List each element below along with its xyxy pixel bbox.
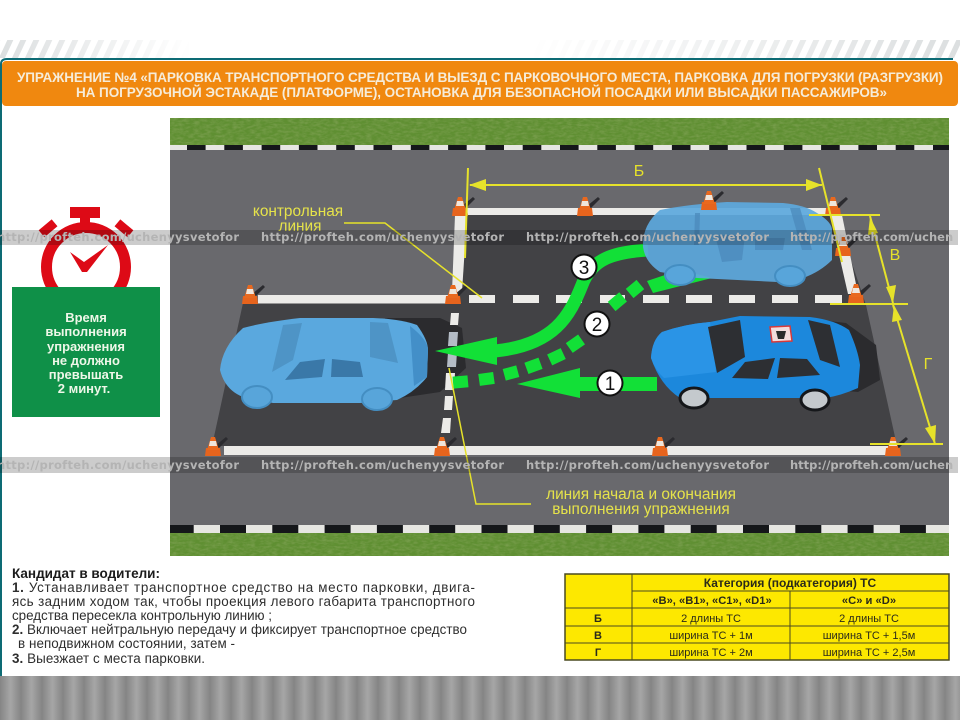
- watermark band upper: [0, 230, 958, 245]
- time-limit text: выполнения: [45, 324, 127, 339]
- watermark band lower: http://profteh.com/uchenyysvetofor: [0, 458, 239, 472]
- header banner: [2, 61, 958, 106]
- table rows: В: [594, 630, 602, 642]
- green time-limit box: [12, 287, 160, 417]
- arrow 3: curved path: [435, 250, 648, 365]
- table header: Категория (подкатегория) ТС: [704, 576, 877, 590]
- table header: «В», «В1», «С1», «D1»: [652, 595, 772, 607]
- watermark band lower: http://profteh.com/uchenyysvetofor: [526, 458, 769, 472]
- instructions text: средства пересекла контрольную линию ;: [12, 608, 272, 623]
- table rows: [594, 613, 915, 659]
- top hatch strip: [0, 40, 960, 58]
- parking lot dark asphalt: [212, 213, 897, 446]
- instructions text: ясь задним ходом так, чтобы проекция левого габарита транспортного: [12, 594, 475, 609]
- watermark band lower: http://profteh.com/uchenyysvetofor: [261, 458, 504, 472]
- dimension label Б: Б: [634, 163, 644, 180]
- step marker 2: [584, 312, 610, 336]
- dimension label Г: Г: [924, 356, 933, 373]
- real car: blue sedan with training sign: [651, 316, 860, 410]
- step marker 1: 1: [605, 374, 615, 395]
- table rows: Б: [594, 613, 602, 625]
- table rows: ширина ТС + 1м: [669, 630, 753, 642]
- table rows: 2 длины ТС: [681, 613, 741, 625]
- instructions text: 3. Выезжает с места парковки.: [12, 651, 205, 666]
- watermark band lower: http://profteh.com/uchen: [790, 458, 953, 472]
- instructions text: 2. Включает нейтральную передачу и фиксирует транспортное средство: [12, 622, 467, 637]
- table rows: ширина ТС + 2,5м: [823, 647, 915, 659]
- car shadows: [385, 318, 880, 398]
- instructions text: 1. Устанавливает транспортное средство на место парковки, двига-: [12, 580, 475, 595]
- start line dashes: [441, 313, 459, 433]
- cones: [205, 197, 908, 456]
- step marker 3: [572, 254, 596, 280]
- callout: start and finish line: линия начала и окончания: [546, 486, 736, 503]
- arrow 2: dashed path: [453, 270, 712, 389]
- instructions text: в неподвижном состоянии, затем -: [18, 636, 235, 651]
- watermark band upper: http://profteh.com/uchen: [790, 230, 953, 244]
- watermark band upper: http://profteh.com/uchenyysvetofor: [526, 230, 769, 244]
- instructions text: Кандидат в водители:: [12, 566, 160, 581]
- white parking markings: [224, 208, 896, 455]
- top curb: [170, 145, 949, 150]
- arrow 1: straight path: [517, 368, 657, 398]
- time-limit text: упражнения: [47, 339, 125, 354]
- dimensions table: [565, 574, 949, 660]
- ghost car: top slot: [643, 191, 832, 286]
- bottom grass: [170, 533, 949, 556]
- table rows: ширина ТС + 1,5м: [823, 630, 915, 642]
- header title: [17, 70, 943, 100]
- bottom striped band: [0, 676, 960, 720]
- bottom curb: [170, 525, 949, 533]
- watermark band lower: [0, 457, 958, 473]
- road asphalt: [170, 150, 949, 526]
- header title: УПРАЖНЕНИЕ №4 «ПАРКОВКА ТРАНСПОРТНОГО СРЕДСТВА И ВЫЕЗД С ПАРКОВОЧНОГО МЕСТА, ПАРКОВКА ДЛЯ ПОГРУЗКИ (РАЗГРУЗКИ): [17, 70, 943, 85]
- dimension label В: В: [890, 247, 900, 264]
- table header: [652, 576, 896, 607]
- step marker 1: [598, 370, 622, 396]
- watermark band upper: http://profteh.com/uchenyysvetofor: [261, 230, 504, 244]
- table rows: ширина ТС + 2м: [669, 647, 753, 659]
- callout: control line: линия: [278, 218, 322, 235]
- header title: НА ПОГРУЗОЧНОЙ ЭСТАКАДЕ (ПЛАТФОРМЕ), ОСТАНОВКА ДЛЯ БЕЗОПАСНОЙ ПОСАДКИ ИЛИ ВЫСАДКИ ПАССАЖИРОВ»: [76, 85, 887, 100]
- time-limit text: [45, 310, 127, 396]
- table rows: Г: [595, 647, 602, 659]
- top grass: [170, 118, 949, 145]
- parking diagram: [170, 118, 949, 556]
- step marker 3: 3: [579, 258, 589, 279]
- callout: start and finish line: выполнения упражнения: [552, 501, 730, 518]
- time-limit text: 2 минут.: [58, 381, 110, 396]
- callout: control line: [253, 203, 482, 298]
- table header: «С» и «D»: [842, 595, 896, 607]
- callout: control line: контрольная: [253, 203, 343, 220]
- watermark band upper: http://profteh.com/uchenyysvetofor: [0, 230, 239, 244]
- instructions text: [12, 566, 475, 666]
- time-limit text: не должно: [52, 353, 120, 368]
- dimension lines: [465, 168, 943, 444]
- time-limit text: превышать: [49, 367, 123, 382]
- step marker 2: 2: [592, 315, 602, 336]
- table rows: 2 длины ТС: [839, 613, 899, 625]
- time-limit text: Время: [65, 310, 107, 325]
- training sign on roof: [770, 326, 792, 342]
- callout: start and finish line: [449, 368, 736, 518]
- ghost car: parked left: [220, 318, 428, 410]
- icon: stopwatch: [39, 207, 133, 306]
